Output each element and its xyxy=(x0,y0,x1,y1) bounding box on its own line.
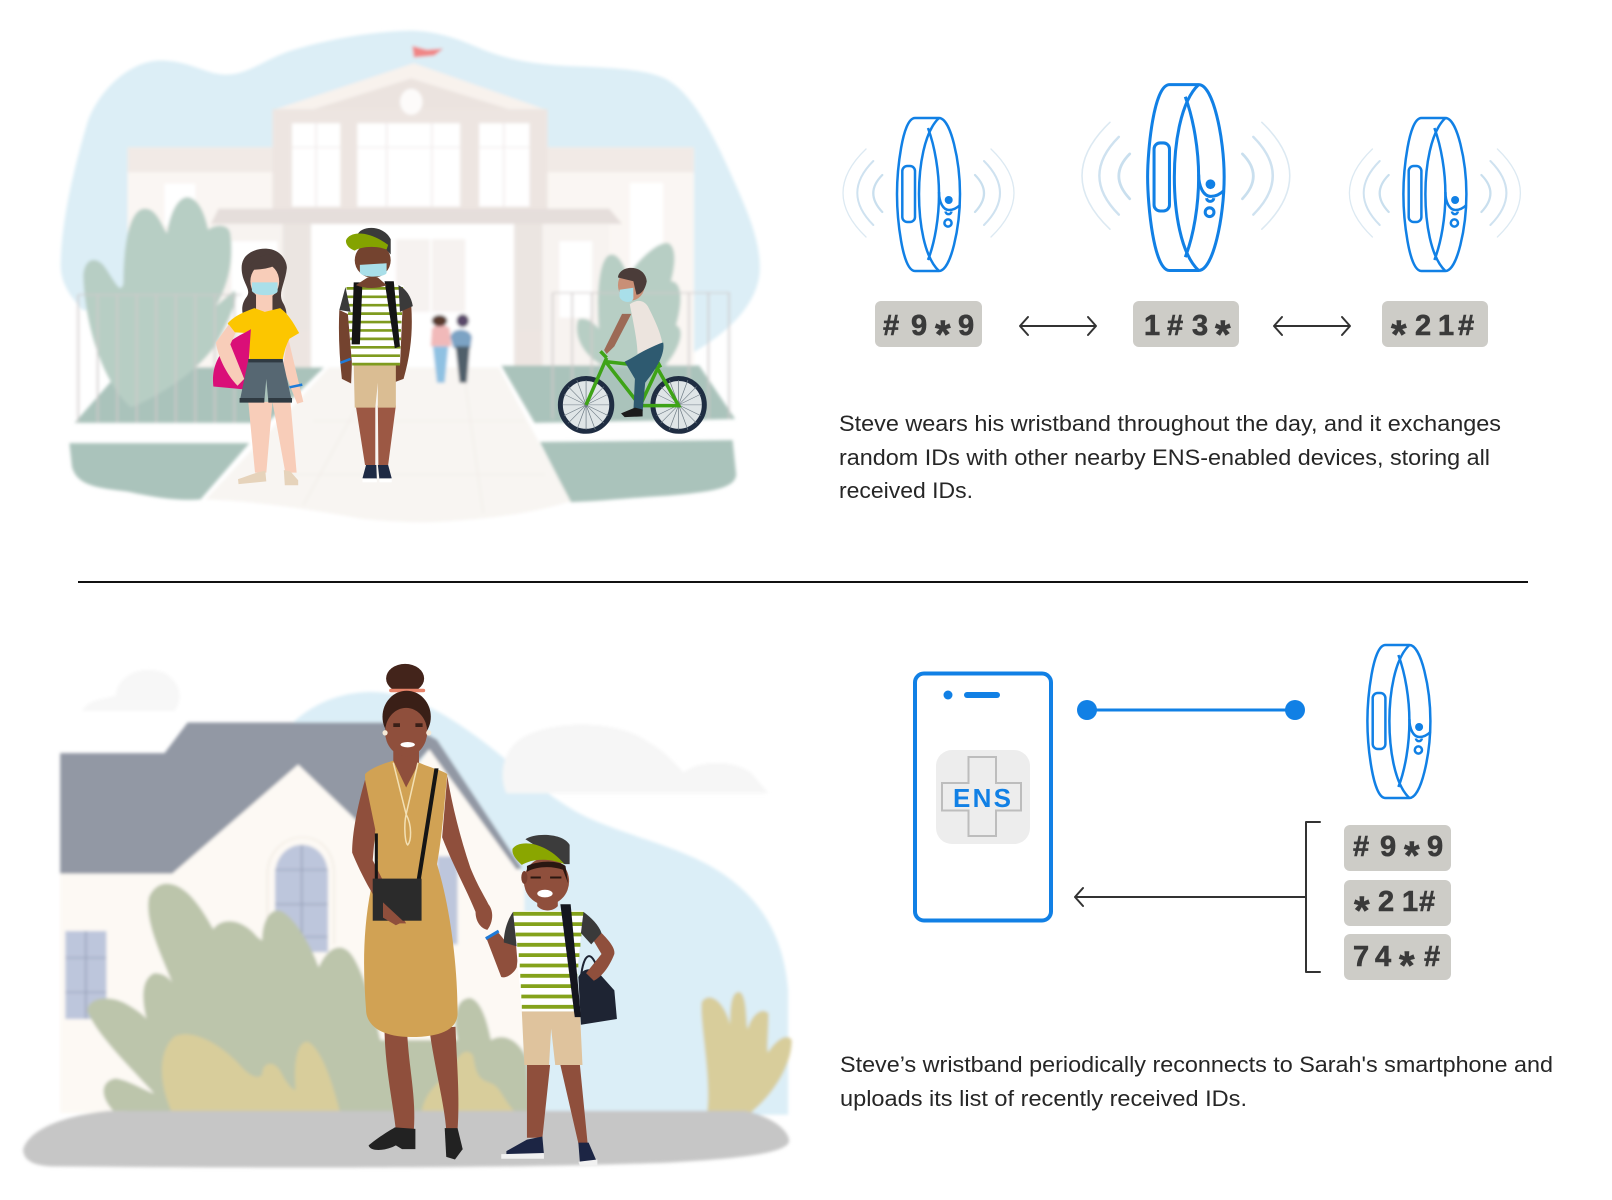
ID tag: 74*#: # xyxy=(1424,941,1440,973)
woman in yellow dress xyxy=(352,664,492,1160)
text block: step description: Steve wears his wristband throughout the day, and it exchanges xyxy=(839,411,1501,436)
ID tag: #9*9: 9 xyxy=(1427,831,1443,863)
icon: wristband 2 with signal waves xyxy=(1082,85,1290,271)
ID tag 2: 3 xyxy=(1192,310,1208,342)
characters xyxy=(352,664,617,1166)
ID tag: 74*#: 4 xyxy=(1375,941,1391,973)
ID tag list xyxy=(1344,825,1451,988)
girl with mask and backpack xyxy=(213,249,303,485)
ID tag 3: 2 xyxy=(1415,310,1431,342)
text block: step description: received IDs. xyxy=(839,478,973,503)
icon: wristband 1 with signal waves xyxy=(843,118,1014,271)
icon: smartphone xyxy=(915,674,1051,920)
ID tag: 74*#: * xyxy=(1399,944,1415,988)
cyclist xyxy=(560,268,704,431)
ID tag: *21# xyxy=(1344,880,1451,933)
ID tag 1 xyxy=(875,301,982,357)
ID tag 1: # xyxy=(883,310,899,342)
icon: wristband 3 with signal waves xyxy=(1349,118,1520,271)
ID tag: *21#: 1 xyxy=(1402,886,1418,918)
text block: step description: random IDs with other nearby ENS-enabled devices, storing all xyxy=(839,445,1490,470)
ID tag: 74*#: 7 xyxy=(1353,941,1369,973)
ID tag: #9*9: # xyxy=(1353,831,1369,863)
ID tag 1: 9 xyxy=(911,310,927,342)
ID tag 2 xyxy=(1133,301,1239,357)
characters xyxy=(213,228,704,485)
arrow: two-way exchange 1 xyxy=(1020,317,1096,335)
ID tag 3: * xyxy=(1391,313,1407,357)
ID tag: #9*9 xyxy=(1344,825,1451,878)
panel: wristband uploads IDs to phone xyxy=(840,645,1553,1111)
illustration: school scene xyxy=(61,31,760,522)
text block: step description xyxy=(839,411,1501,503)
arrow: two-way exchange 2 xyxy=(1274,317,1350,335)
bracket and arrow to phone xyxy=(1075,822,1320,972)
ID tag 1: 9 xyxy=(958,310,974,342)
connection line xyxy=(1077,700,1305,720)
divider xyxy=(78,581,1528,583)
ID tag 3: 1 xyxy=(1438,310,1454,342)
boy with mask and striped shirt xyxy=(339,228,413,482)
text block: step description: Steve’s wristband periodically reconnects to Sarah's smartphone and xyxy=(840,1052,1553,1077)
ID tag 2: * xyxy=(1215,313,1231,357)
text block: step description: uploads its list of recently received IDs. xyxy=(840,1086,1247,1111)
ID tag 1: * xyxy=(935,313,951,357)
ID tag: *21#: # xyxy=(1419,886,1435,918)
ID tag: #9*9: 9 xyxy=(1380,831,1396,863)
text block: step description xyxy=(840,1052,1553,1111)
ID tag 3 xyxy=(1382,301,1488,357)
ID tag: *21#: * xyxy=(1354,889,1370,933)
house background, blurred xyxy=(23,670,792,1168)
ID tag: #9*9: * xyxy=(1404,834,1420,878)
ID tag: 74*# xyxy=(1344,934,1451,988)
ID tag 3: # xyxy=(1458,310,1474,342)
ID tag 2: # xyxy=(1167,310,1183,342)
ID tag 2: 1 xyxy=(1144,310,1160,342)
icon: ENS app xyxy=(936,750,1030,844)
boy smiling with bag xyxy=(486,835,617,1166)
icon: ENS app: ENS xyxy=(953,783,1011,813)
ID tag: *21#: 2 xyxy=(1378,886,1394,918)
school background, blurred xyxy=(61,31,760,522)
icon: wristband xyxy=(1367,645,1430,798)
panel: wristbands exchanging IDs xyxy=(839,85,1520,503)
illustration: home scene xyxy=(23,664,792,1168)
